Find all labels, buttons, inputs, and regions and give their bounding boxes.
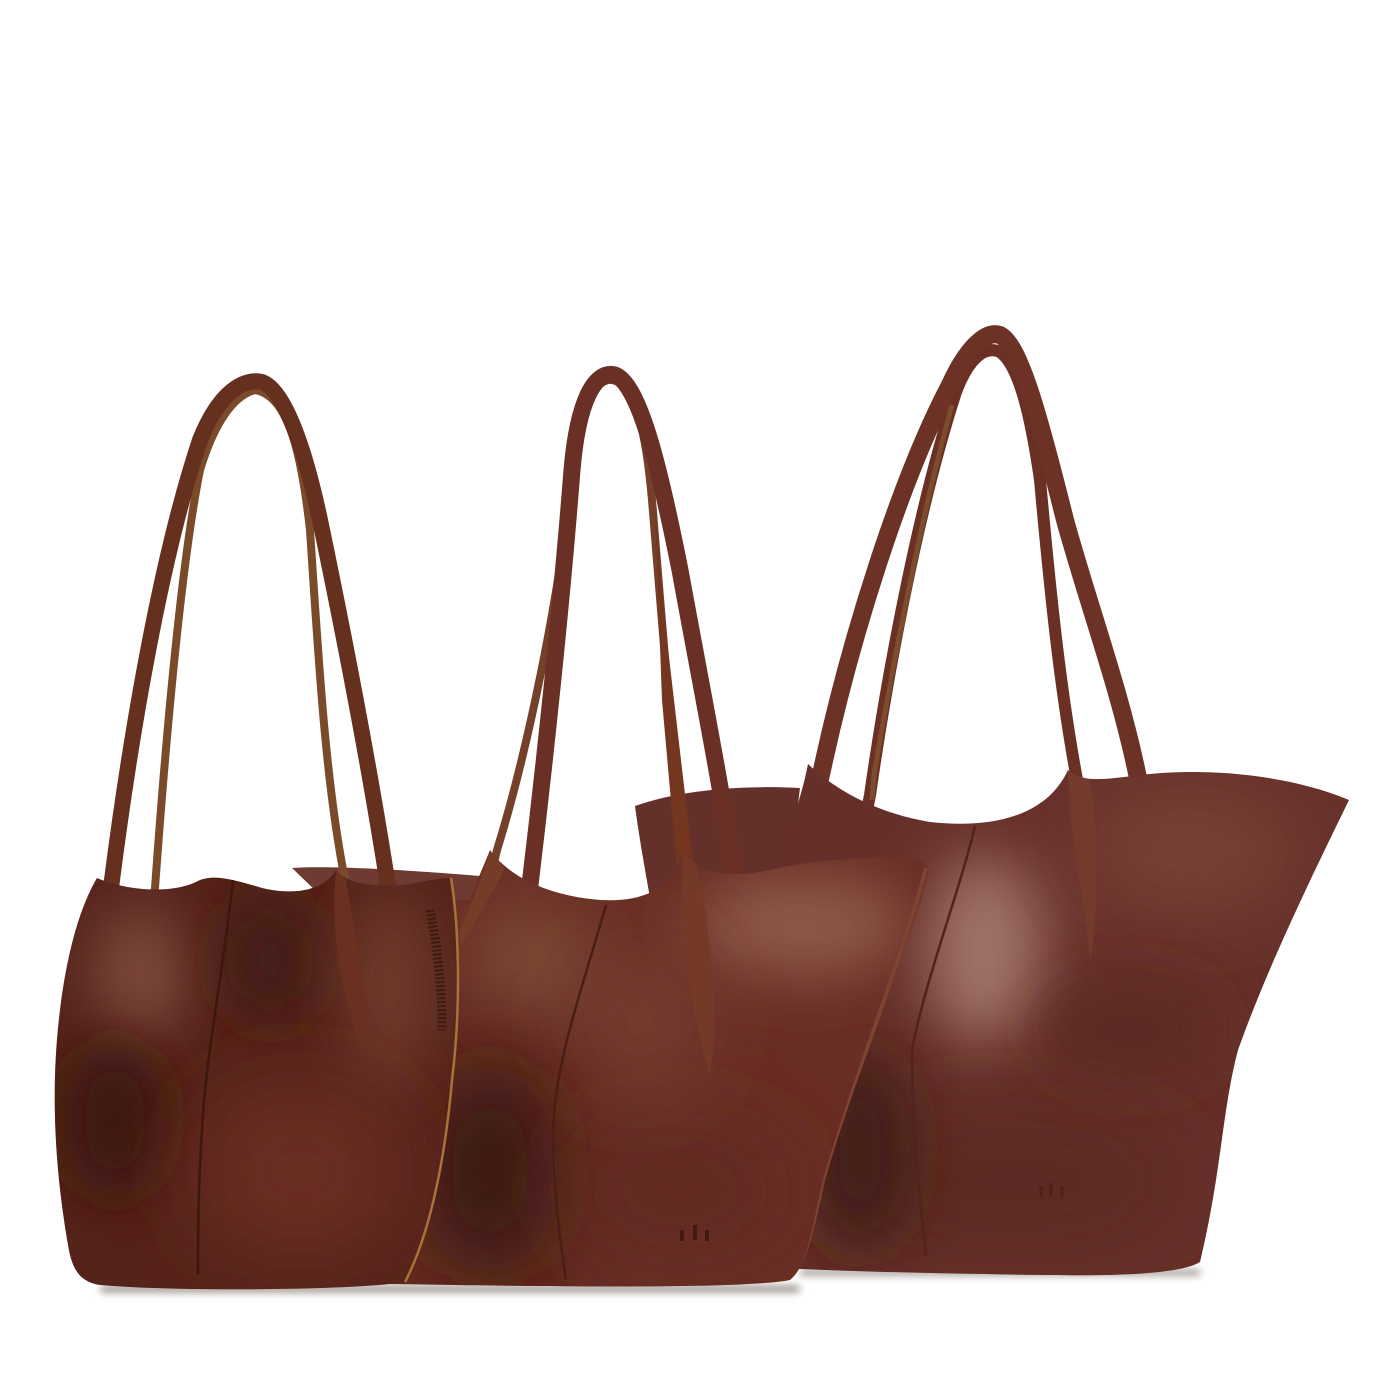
body (55, 870, 458, 1289)
handles (490, 374, 738, 915)
logo mark (682, 1225, 707, 1241)
handle gusset (1068, 770, 1097, 960)
left edge fold (459, 850, 505, 934)
handles (814, 334, 1142, 825)
body (770, 764, 1349, 1275)
handles (109, 381, 391, 905)
left back panel (292, 867, 480, 915)
leather highlights (95, 905, 185, 1045)
floor shadow (100, 1270, 1200, 1292)
right edge highlight (795, 868, 926, 1280)
photo: three brown leather tote bags (54, 325, 1349, 1298)
seam (912, 826, 975, 1256)
body (390, 850, 928, 1286)
bag: large right tote (635, 334, 1349, 1275)
back panel (635, 787, 800, 898)
seam (553, 905, 606, 1280)
leather highlights (690, 875, 910, 975)
handle gusset (682, 850, 714, 1075)
bag: medium centre tote (292, 374, 928, 1287)
tan raw edge (405, 878, 458, 1282)
leather highlights (925, 855, 1045, 1045)
inner handle thickening (655, 510, 695, 880)
seam (198, 880, 233, 1275)
bag: small left tote (55, 381, 458, 1289)
embossed text mark (430, 910, 442, 1030)
logo mark (1041, 1183, 1062, 1196)
handle gusset (334, 870, 356, 1008)
